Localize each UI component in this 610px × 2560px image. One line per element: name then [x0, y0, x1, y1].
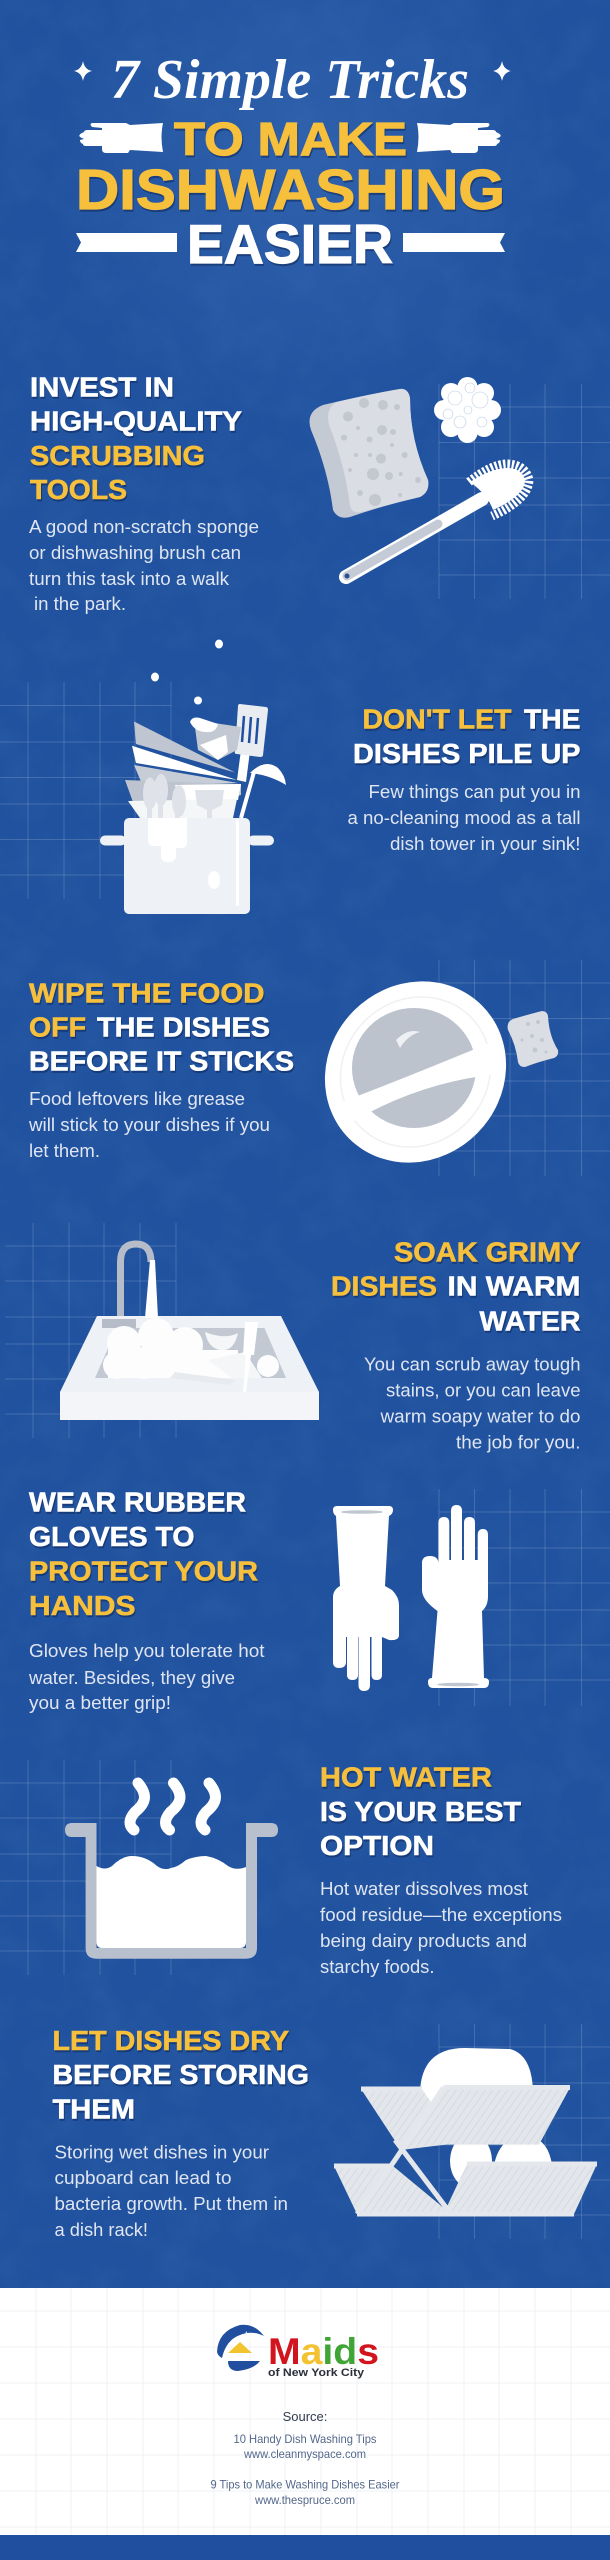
heading: THE	[524, 704, 580, 734]
icon: sponge	[310, 389, 428, 518]
lower rack right	[444, 2164, 597, 2214]
dishes in sink	[170, 1332, 262, 1385]
plates	[125, 722, 241, 818]
body text: water. Besides, they give	[28, 1668, 235, 1688]
body text: Few things can put you in	[368, 782, 580, 802]
body text: bacteria growth. Put them in	[54, 2194, 288, 2214]
body text: turn this task into a walk	[29, 569, 230, 589]
icon: small sponge	[508, 1011, 558, 1067]
upper plates	[420, 2048, 533, 2115]
upper rack back	[361, 2089, 459, 2150]
panel: hot water	[65, 1762, 562, 1977]
icon: dish brush	[344, 464, 529, 578]
icon: dish rack	[334, 2048, 597, 2214]
panel: wipe the food	[28, 944, 558, 1200]
icon: glove fingers up	[422, 1505, 489, 1688]
heading: IS YOUR BEST	[320, 1796, 521, 1827]
pot handles	[100, 836, 274, 846]
heading	[331, 1236, 581, 1336]
heading	[29, 978, 294, 1076]
body text: a dish rack!	[54, 2220, 148, 2240]
heading: DISHES	[331, 1270, 437, 1302]
logo	[217, 2325, 379, 2379]
faucet base	[102, 1319, 136, 1328]
body text: in the park.	[34, 594, 126, 614]
body text: A good non-scratch sponge	[29, 517, 259, 537]
rack frame	[334, 2088, 597, 2214]
heading: DON'T LET	[362, 704, 512, 734]
faucet	[120, 1244, 151, 1318]
heading: HOT WATER	[320, 1762, 492, 1792]
ribbon right	[403, 233, 505, 252]
icon: sink	[60, 1244, 319, 1420]
foam drips	[148, 818, 187, 862]
body text: starchy foods.	[320, 1957, 434, 1977]
pot	[65, 1823, 278, 1959]
basin	[95, 1328, 286, 1378]
heading: IN WARM	[448, 1270, 580, 1302]
body text: will stick to your dishes if you	[28, 1115, 270, 1135]
heading	[30, 372, 242, 505]
lower plates	[450, 2134, 552, 2188]
heading: BEFORE STORING	[52, 2059, 309, 2090]
title script line: 7 Simple Tricks	[111, 49, 469, 111]
title yellow line: TO MAKE	[174, 113, 407, 165]
pot body	[124, 818, 250, 914]
sink front	[60, 1392, 319, 1420]
body text: being dairy products and	[320, 1931, 527, 1951]
body text	[54, 2142, 288, 2240]
sink rim	[60, 1316, 319, 1392]
logo wordmark: Maids	[268, 2331, 379, 2372]
body text: Storing wet dishes in your	[54, 2142, 269, 2162]
body text: let them.	[29, 1141, 100, 1161]
heading: INVEST IN	[30, 372, 174, 402]
icon: glove fingers down	[333, 1506, 399, 1691]
panel: footer	[0, 2288, 610, 2559]
title white line: EASIER	[187, 213, 393, 275]
sources: 9 Tips to Make Washing Dishes Easier	[210, 2478, 400, 2492]
panel: don't let the dishes pile up	[100, 640, 580, 914]
heading	[353, 704, 580, 769]
body text	[28, 1641, 264, 1713]
body text: Hot water dissolves most	[320, 1879, 528, 1899]
heading: SCRUBBING	[30, 440, 205, 471]
panel: soak grimy dishes	[60, 1236, 581, 1452]
icon: sparkle left	[74, 61, 92, 81]
heading: OFF	[29, 1012, 86, 1042]
heading: TOOLS	[30, 474, 127, 505]
sources: www.cleanmyspace.com	[243, 2447, 366, 2461]
body text: Gloves help you tolerate hot	[29, 1641, 264, 1661]
body text: stains, or you can leave	[386, 1380, 580, 1400]
heading: WEAR RUBBER	[29, 1486, 246, 1518]
body text: cupboard can lead to	[54, 2168, 232, 2188]
water	[96, 1856, 246, 1948]
heading: THE DISHES	[97, 1012, 270, 1042]
spoons and fork	[143, 774, 224, 820]
body text: or dishwashing brush can	[29, 543, 241, 563]
title	[74, 49, 511, 275]
body text	[29, 517, 259, 614]
body text: food residue—the exceptions	[320, 1905, 562, 1925]
foam	[103, 1318, 279, 1379]
icon: glove right	[417, 123, 501, 153]
heading: BEFORE IT STICKS	[29, 1046, 294, 1076]
body text: a no-cleaning mood as a tall	[348, 808, 580, 828]
bubbles	[151, 640, 223, 704]
icon: steel wool	[434, 377, 501, 443]
logo subtitle: of New York City	[268, 2367, 365, 2379]
heading: GLOVES TO	[29, 1521, 194, 1552]
heading: LET DISHES DRY	[52, 2025, 289, 2056]
panel: scrubbing tools	[29, 372, 529, 614]
body text: You can scrub away tough	[364, 1354, 580, 1374]
ribbon left	[76, 233, 177, 252]
icon: glove left	[79, 123, 163, 153]
spatula	[235, 704, 268, 782]
title yellow line two: DISHWASHING	[76, 158, 505, 222]
logo swoosh	[217, 2325, 264, 2371]
steam	[130, 1783, 215, 1830]
icon: sparkle right	[493, 61, 511, 81]
sources: Source:	[283, 2409, 327, 2424]
heading: HANDS	[29, 1590, 136, 1621]
spatula in sink	[243, 1322, 258, 1392]
body text	[28, 1089, 270, 1161]
sources: 10 Handy Dish Washing Tips	[234, 2432, 376, 2446]
heading	[29, 1486, 258, 1621]
upper rack front	[408, 2088, 570, 2145]
body text: dish tower in your sink!	[390, 834, 580, 854]
heading: HIGH-QUALITY	[30, 406, 242, 436]
heading: THEM	[52, 2094, 135, 2124]
heading: WATER	[480, 1306, 580, 1336]
icon: pot full of dishes	[100, 640, 286, 914]
heading: WIPE THE FOOD	[29, 978, 264, 1008]
heading	[320, 1762, 521, 1861]
body text: Food leftovers like grease	[29, 1089, 245, 1109]
panel: let dishes dry	[52, 2025, 597, 2240]
heading: PROTECT YOUR	[29, 1556, 258, 1586]
highlight	[208, 820, 239, 906]
icon: steaming pot	[65, 1783, 278, 1959]
icon: plate	[288, 944, 543, 1200]
water stream	[145, 1260, 158, 1318]
ladle	[241, 764, 286, 818]
sources: www.thespruce.com	[254, 2493, 355, 2507]
heading	[52, 2025, 309, 2124]
heading: SOAK GRIMY	[394, 1236, 581, 1268]
body text: you a better grip!	[29, 1693, 171, 1713]
body text	[348, 782, 580, 854]
body text: the job for you.	[456, 1432, 580, 1452]
body text	[320, 1879, 562, 1977]
heading: OPTION	[320, 1830, 434, 1861]
body text	[364, 1354, 580, 1452]
heading: DISHES PILE UP	[353, 738, 580, 769]
bottom bar	[0, 2535, 610, 2559]
sources	[210, 2409, 400, 2507]
bowl	[190, 718, 241, 760]
lower rack left	[334, 2166, 451, 2214]
body text: warm soapy water to do	[379, 1406, 580, 1426]
panel: rubber gloves	[28, 1486, 489, 1713]
